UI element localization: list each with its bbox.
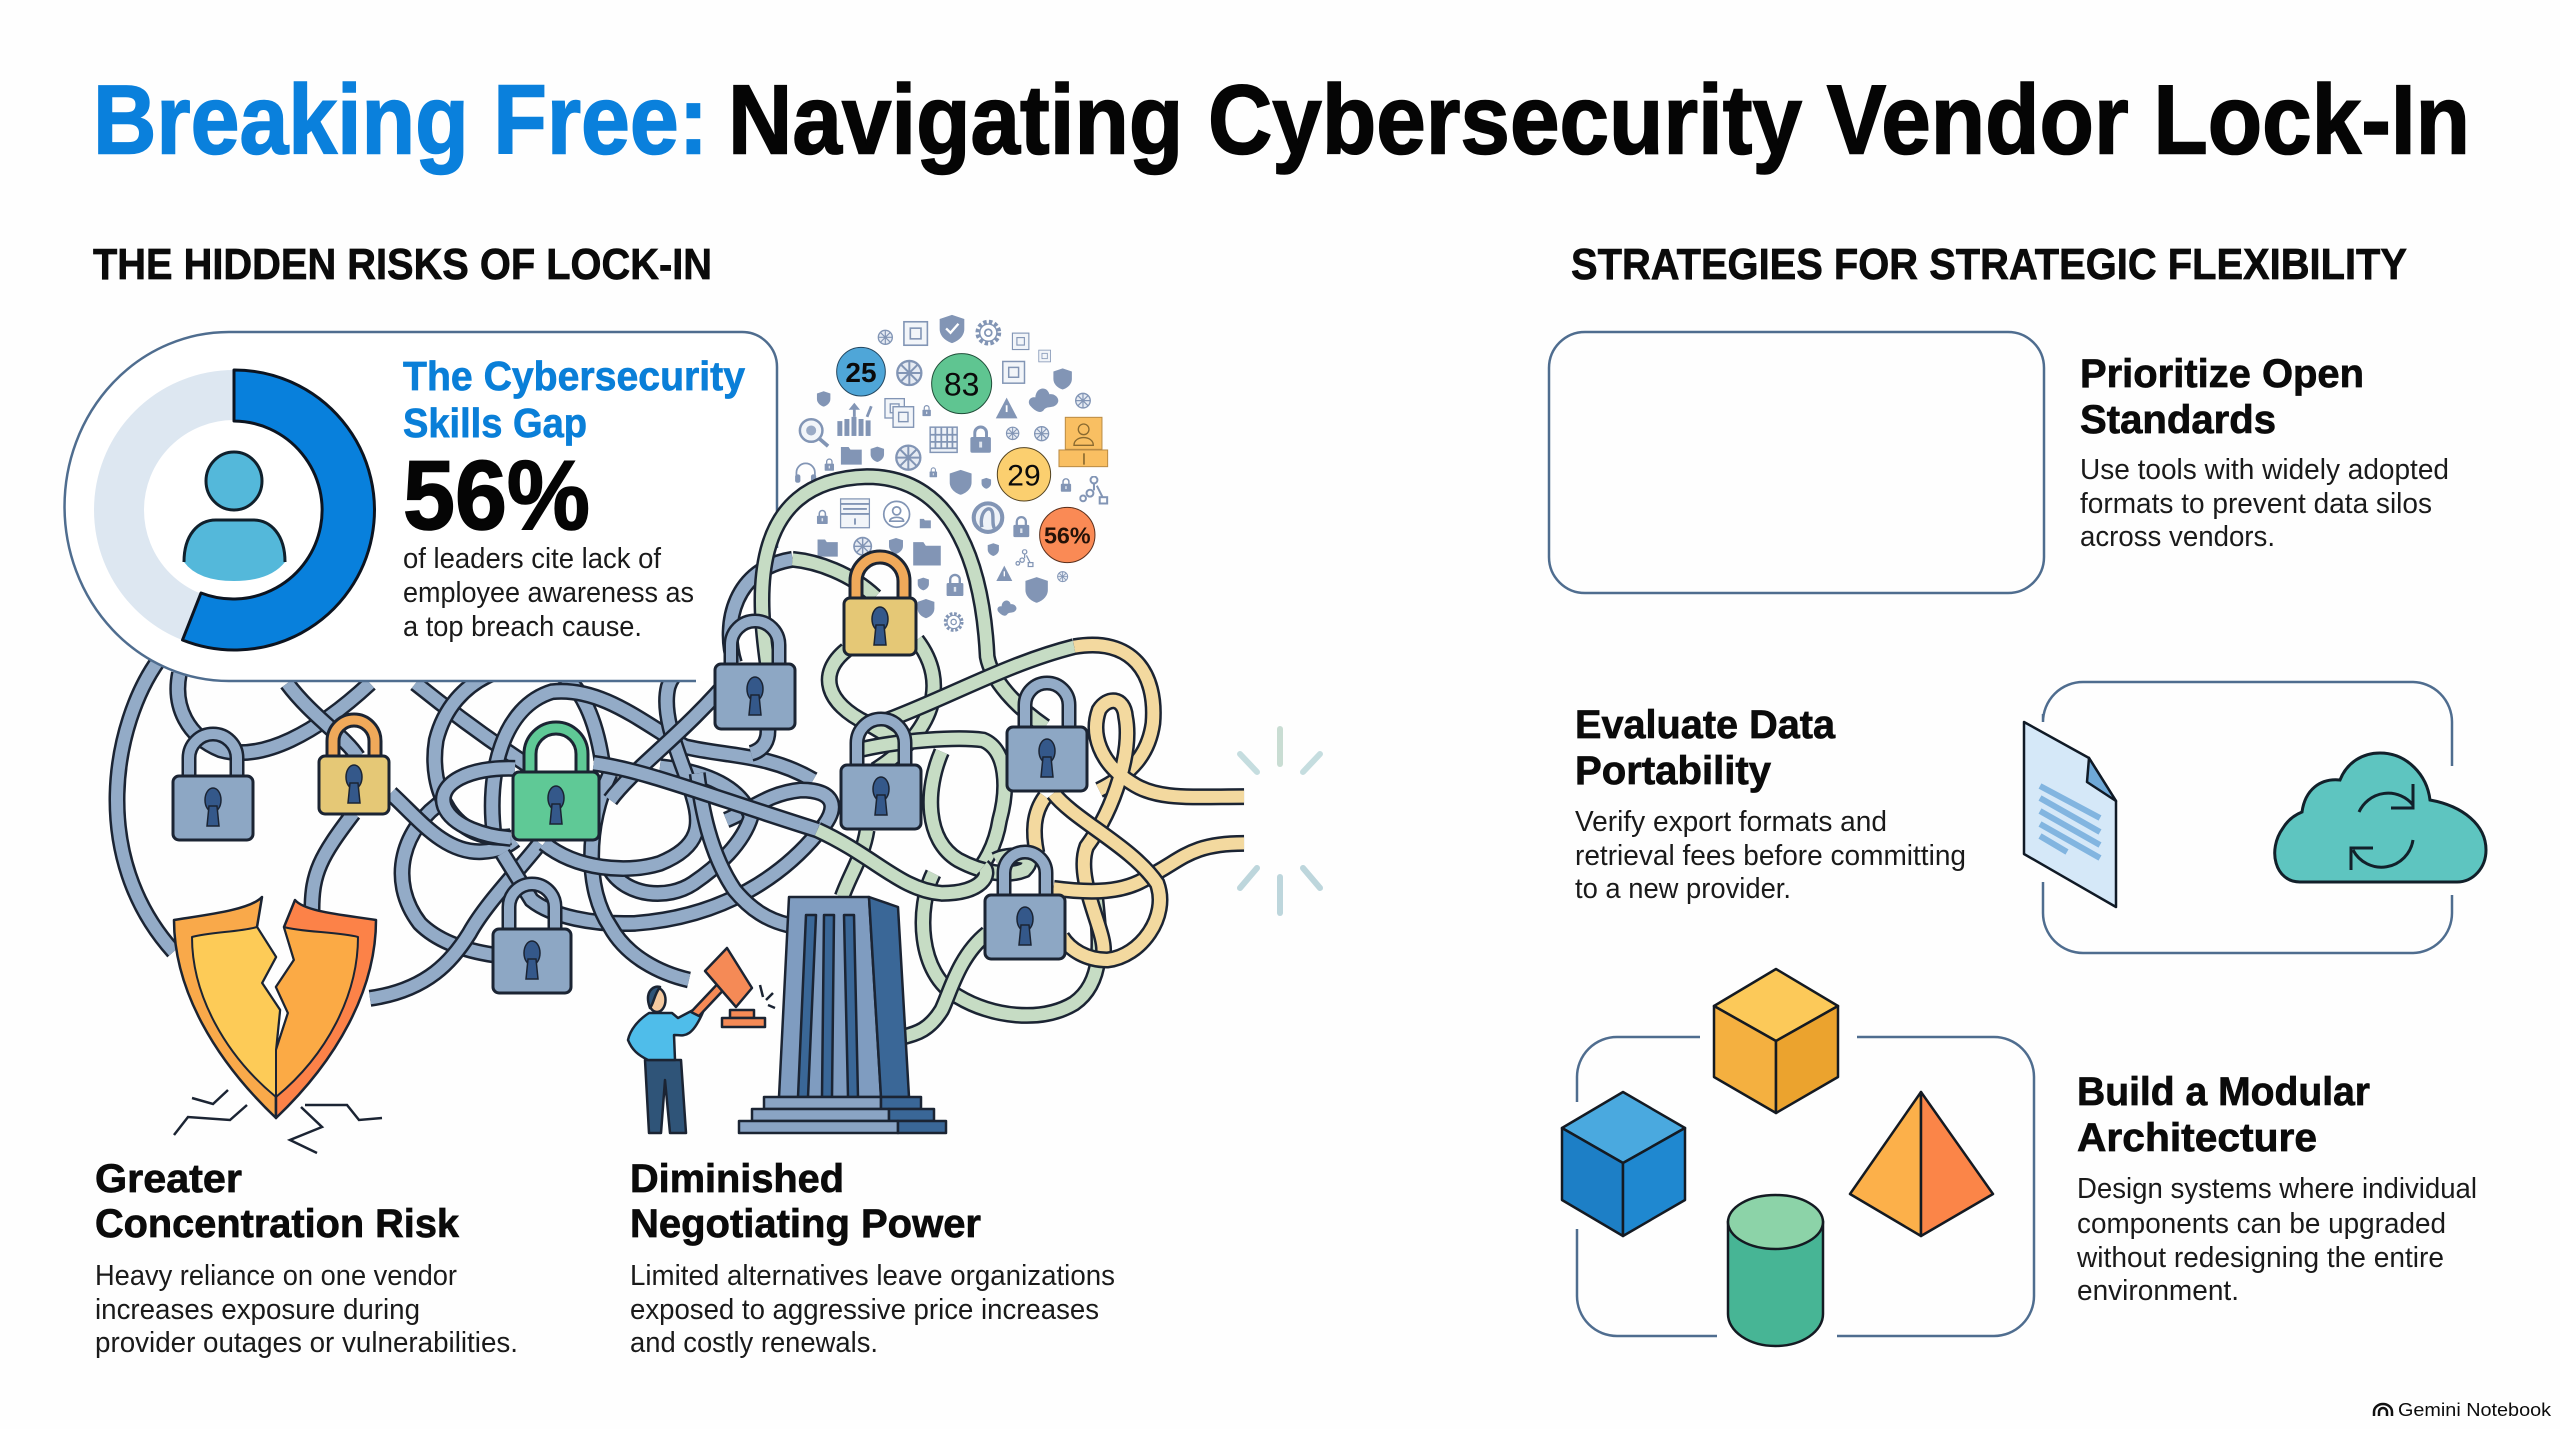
stat heading: The Cybersecurity [403,353,745,399]
icon: document [2024,722,2116,907]
text block: greater concentration risk: increases exposure during [95,1294,420,1326]
stat description [403,543,694,643]
panel: open standards frame [1549,332,2044,593]
text block: diminished negotiating power: Limited alternatives leave organizations [630,1260,1115,1292]
badge: 29: 29 [1007,459,1041,492]
icon: pyramid [1850,1092,1993,1236]
badge: 25 [837,347,885,396]
text block: build a modular architecture: environment. [2077,1275,2239,1307]
text block: prioritize open standards: Prioritize Open [2080,352,2364,396]
text block: diminished negotiating power: and costly renewals. [630,1327,878,1359]
burst marks [1240,729,1320,913]
title: Breaking Free: [93,64,708,174]
text block: prioritize open standards: across vendors. [2080,521,2275,553]
badge: 83 [932,354,992,414]
text block: diminished negotiating power [630,1157,1115,1359]
footer: gemini notebook mark: Gemini Notebook [2398,1400,2552,1420]
stat value: 56% [403,440,590,550]
icon: padlock 4 [715,621,795,729]
icon cloud with statistics badges [795,315,1108,630]
icon: padlock 7 [985,852,1065,959]
heading: the hidden risks: THE HIDDEN RISKS OF LOCK-IN [93,240,712,289]
text block: build a modular architecture: Build a Modular [2077,1070,2370,1114]
text block: evaluate data portability: Evaluate Data [1575,703,1836,747]
text block: build a modular architecture: without redesigning the entire [2076,1242,2444,1274]
badge: 25: 25 [845,357,877,388]
text block: evaluate data portability: retrieval fees before committing [1575,840,1966,872]
donut chart: 56 percent [119,370,374,650]
text block: build a modular architecture: Architecture [2077,1116,2317,1160]
stat description: of leaders cite lack of [403,543,662,575]
stat heading: Skills Gap [403,400,587,446]
icon: broken shield [174,897,376,1118]
text block: greater concentration risk: Greater [95,1157,242,1201]
panel: skills gap stat card [65,332,777,681]
text block: build a modular architecture: components can be upgraded [2077,1208,2446,1240]
icon: padlock 3 green [513,728,599,840]
icon: padlock 9 yellow [844,557,916,655]
icon: person with gavel [628,948,775,1133]
panel: data portability frame [2043,682,2452,953]
stat description: employee awareness as [403,577,694,609]
text block: prioritize open standards: Use tools with widely adopted [2080,454,2449,486]
badge: 56% [1040,507,1095,563]
icon: padlock 5 [841,719,921,829]
text block: prioritize open standards [2080,352,2449,553]
upper and right cable tangle [730,477,1244,1037]
text block: greater concentration risk: provider outages or vulnerabilities. [95,1327,518,1359]
text block: diminished negotiating power: exposed to aggressive price increases [630,1294,1099,1326]
panel: modular architecture frame [1577,1037,2034,1336]
icon: orange user folder [1059,417,1108,467]
badge: 83: 83 [944,366,979,402]
text block: greater concentration risk: Heavy reliance on one vendor [95,1260,457,1292]
icon: yellow cube [1714,969,1838,1113]
text block: build a modular architecture [2076,1070,2477,1307]
text block: greater concentration risk [95,1157,518,1359]
icon: padlock 8 [493,884,571,993]
lower cable tangle [117,655,832,998]
icon: cylinder [1728,1195,1823,1346]
text block: diminished negotiating power: Diminished [630,1157,844,1201]
text block: prioritize open standards: Standards [2080,398,2276,442]
icon: padlock 2 yellow [319,720,389,814]
text block: evaluate data portability [1575,703,1966,905]
stat description: a top breach cause. [403,611,642,643]
text block: evaluate data portability: to a new provider. [1575,873,1791,905]
badge: 29 [997,448,1051,501]
icon: person [184,452,285,581]
badge: 56%: 56% [1044,522,1091,548]
icon: blue cube [1562,1092,1685,1236]
icon: padlock 1 [173,734,253,840]
ground cracks [174,1090,382,1153]
text block: prioritize open standards: formats to prevent data silos [2080,488,2432,520]
text block: greater concentration risk: Concentration Risk [95,1202,460,1246]
text block: build a modular architecture: Design systems where individual [2077,1173,2477,1205]
stat heading [403,353,745,446]
icon: cloud sync [2275,753,2486,882]
text block: evaluate data portability: Verify export formats and [1575,806,1887,838]
text block: diminished negotiating power: Negotiating Power [630,1202,981,1246]
icon: padlock 6 [1007,683,1087,791]
icon: pillar [739,897,946,1133]
text block: evaluate data portability: Portability [1575,749,1772,793]
heading: strategies: STRATEGIES FOR STRATEGIC FLEXIBILITY [1571,240,2407,289]
